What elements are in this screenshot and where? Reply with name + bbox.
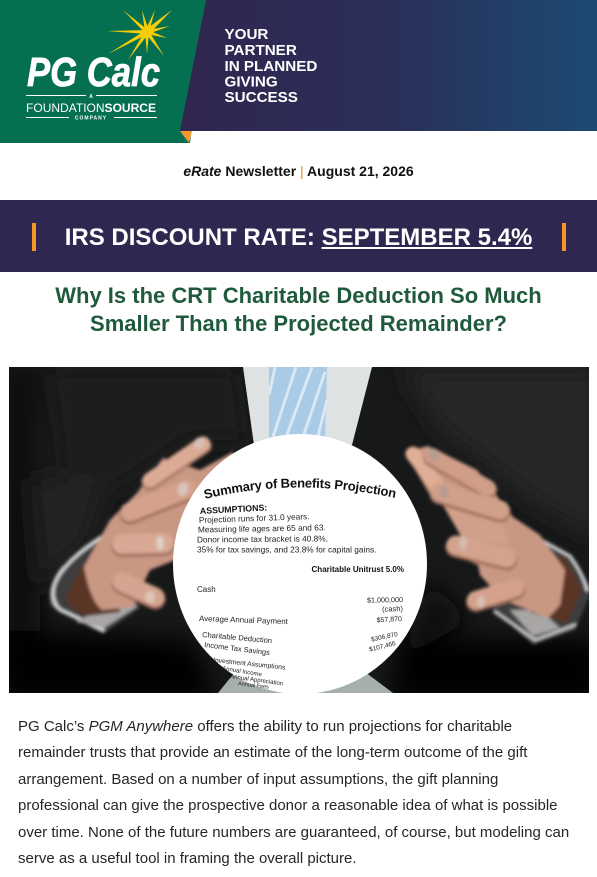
tagline: SUCCESS (224, 89, 298, 106)
body paragraph (18, 718, 569, 867)
projection text in ball: Average Annual Payment (199, 614, 289, 626)
projection text in ball: Measuring life ages are 65 and 63. (198, 522, 326, 534)
projection text in ball: (cash) (382, 604, 404, 614)
projection text in ball: Projection runs for 31.0 years. (199, 511, 310, 525)
tagline (224, 26, 317, 106)
logo wordmark: FOUNDATION SOURCE (26, 103, 156, 115)
body paragraph: serve as a useful tool in framing the overall picture. (18, 850, 357, 867)
article title (55, 283, 542, 336)
projection text in ball: Charitable Unitrust 5.0% (312, 565, 404, 574)
article title: Smaller Than the Projected Remainder? (90, 310, 507, 336)
orange corner accent (180, 131, 192, 143)
palm (405, 446, 565, 618)
palm (84, 452, 240, 610)
purple gradient panel (180, 0, 597, 131)
projection text in ball: Cash (197, 585, 216, 594)
ball stand (218, 672, 393, 693)
projection text in ball: Donor income tax bracket is 40.8%, (197, 533, 328, 544)
logo wordmark (26, 49, 160, 122)
photo: hands around crystal ball (9, 367, 589, 693)
projection text in ball: Annual Income (222, 666, 263, 678)
discount rate banner: IRS DISCOUNT RATE: SEPTEMBER 5.4% (65, 224, 532, 251)
projection text in ball: $107,466 (368, 640, 397, 654)
fingernails (192, 436, 205, 450)
suit background (9, 367, 589, 693)
newsletter line: eRate Newsletter | August 21, 2026 (183, 163, 414, 179)
projection text in ball: Annual Appreciation (230, 674, 283, 687)
tagline: YOUR (224, 26, 268, 43)
left hand (49, 435, 240, 634)
projection text in ball: Investment Assumptions (213, 657, 286, 672)
header banner (0, 0, 597, 143)
body paragraph: over time. None of the future numbers are guaranteed, of course, but modeling can (18, 824, 569, 841)
projection text in ball (197, 478, 404, 689)
crystal ball (173, 434, 427, 694)
fingernails (428, 448, 440, 462)
body paragraph: arrangement. Based on a number of input assumptions, the gift planning (18, 771, 498, 788)
green logo panel (0, 0, 206, 143)
discount rate banner (0, 200, 597, 272)
striped tie (269, 367, 327, 440)
projection text in ball: ASSUMPTIONS: (200, 502, 268, 516)
logo wordmark: COMPANY (75, 116, 107, 122)
right hand (405, 446, 592, 645)
fingers (150, 446, 203, 482)
cuff (49, 533, 140, 634)
projection text in ball: Charitable Deduction (202, 630, 272, 645)
logo wordmark: PG Calc (27, 49, 160, 95)
article title: Why Is the CRT Charitable Deduction So Much (55, 283, 542, 308)
cuff (492, 544, 589, 646)
tagline: GIVING (224, 74, 278, 90)
projection text in ball: Summary of Benefits Projection (204, 478, 396, 498)
projection text in ball: Annual Fees (238, 681, 269, 691)
projection text in ball: 35% for tax savings, and 23.8% for capital gains. (197, 544, 376, 554)
icon: gold starburst (107, 10, 172, 60)
tagline: PARTNER (224, 42, 297, 59)
tagline: IN PLANNED (224, 58, 317, 75)
projection text in ball: Income Tax Savings (204, 640, 271, 657)
body paragraph: PG Calc’s PGM Anywhere offers the ability to run projections for charitable (18, 718, 512, 735)
body paragraph: professional can give the prospective donor a reasonable idea of what is possible (18, 797, 558, 814)
body paragraph: remainder trusts that provide an estimate of the long-term outcome of the gift (18, 744, 527, 761)
shirt (243, 367, 372, 445)
fingers (413, 454, 440, 490)
logo wordmark: A (89, 94, 93, 100)
projection text in ball: $57,870 (376, 616, 402, 624)
projection text in ball: $1,000,000 (367, 595, 403, 605)
projection text in ball: $306,870 (370, 631, 399, 644)
